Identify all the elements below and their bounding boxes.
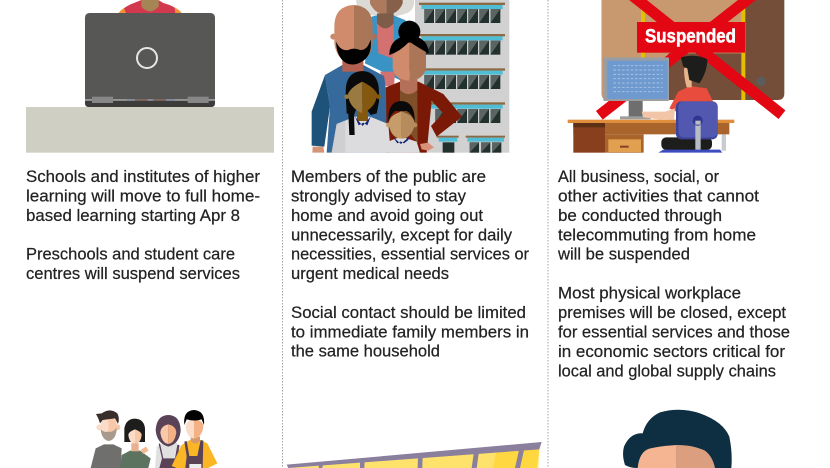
label: suspended banner: Suspended (645, 27, 736, 48)
panel: suspended workplace illustration (568, 0, 784, 153)
text block: schools: learning will move to full home- (26, 188, 260, 206)
panel: group of workers illustration (91, 410, 217, 468)
text block: public advisory: strongly advised to stay (291, 188, 467, 206)
text block: public advisory: the same household (291, 343, 440, 361)
text block: schools: based learning starting Apr 8 (26, 207, 240, 225)
text block: public advisory: urgent medical needs (291, 265, 449, 283)
icon: woman with bob (120, 419, 151, 468)
icon: bearded father (312, 5, 390, 153)
text block: suspended activities: Most physical workplace (558, 284, 741, 302)
text block: public advisory (291, 168, 530, 361)
text block: suspended activities: in economic sectors critical for (558, 343, 786, 361)
text block: suspended activities (557, 168, 790, 380)
text block: schools: centres will suspend services (26, 265, 240, 283)
icon: apartment block (415, 0, 509, 153)
text block: suspended activities: for essential services and those (558, 323, 790, 341)
text block: public advisory: Social contact should be limited (291, 304, 526, 322)
icon: laptop (85, 13, 215, 107)
text block: suspended activities: local and global supply chains (558, 362, 776, 380)
icon: son (386, 101, 420, 153)
text block: suspended activities: other activities that cannot (558, 188, 760, 206)
text block: suspended activities: premises will be closed, except (558, 304, 786, 322)
panel: home-based learning illustration (26, 0, 274, 153)
icon: red cross (599, 0, 782, 115)
panel: yellow roof illustration (287, 442, 542, 468)
icon: man's head (623, 410, 732, 468)
text block: public advisory: to immediate family members in (291, 323, 529, 341)
icon: computer monitor (603, 57, 669, 119)
label: suspended banner (637, 22, 745, 53)
text block: suspended activities: All business, social, or (558, 168, 720, 186)
icon: woman in hijab (155, 415, 183, 468)
text block: public advisory: necessities, essential services or (291, 246, 530, 264)
icon: man in apron (172, 410, 217, 468)
icon: roof canopy (287, 442, 542, 468)
icon: office worker on chair (642, 56, 722, 153)
icon: mother (386, 21, 462, 153)
text block: public advisory: Members of the public are (291, 168, 486, 186)
icon: bearded man (91, 410, 122, 468)
icon: closed door (602, 0, 784, 100)
text block: public advisory: home and avoid going out (291, 207, 483, 225)
text block: suspended activities: be conducted through (558, 207, 722, 225)
text block: public advisory: unnecessarily, except for daily (291, 226, 513, 244)
table (26, 107, 274, 153)
icon: daughter (332, 71, 391, 153)
icon: student behind laptop (118, 0, 182, 13)
text block: schools: Preschools and student care (26, 246, 235, 264)
text block: schools (26, 168, 261, 283)
text block: schools: Schools and institutes of higher (26, 168, 261, 186)
icon: grandmother (356, 0, 417, 87)
text block: suspended activities: telecommuting from home (558, 226, 756, 244)
panel: man portrait illustration (623, 410, 732, 468)
text block: suspended activities: will be suspended (557, 246, 690, 264)
panel: family and apartment block illustration (312, 0, 509, 153)
icon: desk (568, 120, 734, 153)
